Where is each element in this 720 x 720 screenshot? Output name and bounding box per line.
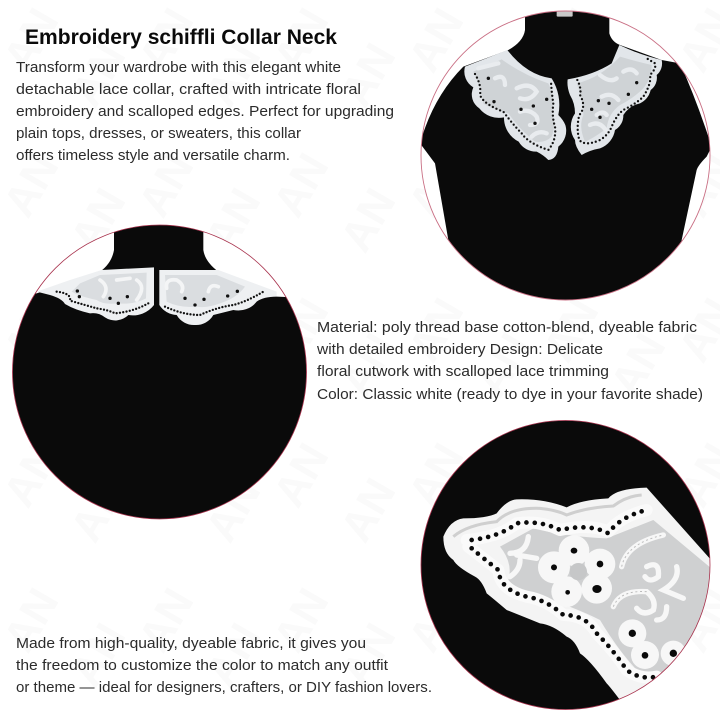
left collar piece — [464, 50, 566, 160]
text block: introduction: Transform your wardrobe with this elegant white — [16, 59, 341, 76]
text block: introduction: offers timeless style and versatile charm. — [16, 147, 290, 164]
title: Embroidery schiffli Collar Neck — [25, 26, 337, 49]
text block: material and colour details: Material: poly thread base cotton-blend, dyeable fabric — [317, 319, 698, 336]
left collar flap — [37, 267, 154, 320]
text block: introduction: plain tops, dresses, or sweaters, this collar — [16, 125, 301, 142]
grey band between edge and eyelets — [453, 495, 642, 537]
text block: introduction: detachable lace collar, crafted with intricate floral — [16, 81, 361, 98]
white embroidered band — [508, 528, 661, 674]
sheer fabric area — [500, 520, 713, 673]
text block: fabric and customisation — [16, 635, 432, 696]
photo circle: lace close-up — [421, 420, 720, 710]
eyelet holes — [472, 510, 647, 540]
right collar piece — [567, 45, 662, 155]
text block: material and colour details — [316, 319, 703, 403]
white background above shoulders — [36, 232, 286, 297]
text block: fabric and customisation: or theme — ideal for designers, crafters, or DIY fashion lovers. — [16, 679, 432, 696]
photo circle: collar back view on mannequin — [0, 223, 320, 519]
text block: introduction: embroidery and scalloped edges. Perfect for upgrading — [16, 103, 394, 120]
floral centre — [538, 535, 686, 669]
swirls and leaves — [510, 535, 683, 620]
text block: fabric and customisation: the freedom to customize the color to match any outfit — [16, 657, 389, 674]
text block: material and colour details: Color: Classic white (ready to dye in your favorite shade) — [317, 386, 703, 403]
mannequin body — [420, 7, 712, 307]
photo circle: collar front view on mannequin — [420, 7, 712, 307]
lace outline — [443, 488, 720, 700]
text block: introduction — [16, 59, 394, 164]
text block: fabric and customisation: Made from high-quality, dyeable fabric, it gives you — [16, 635, 366, 652]
text block: material and colour details: with detailed embroidery Design: Delicate — [316, 341, 603, 358]
text block: material and colour details: floral cutwork with scalloped lace trimming — [317, 363, 609, 380]
right collar flap — [159, 270, 277, 325]
